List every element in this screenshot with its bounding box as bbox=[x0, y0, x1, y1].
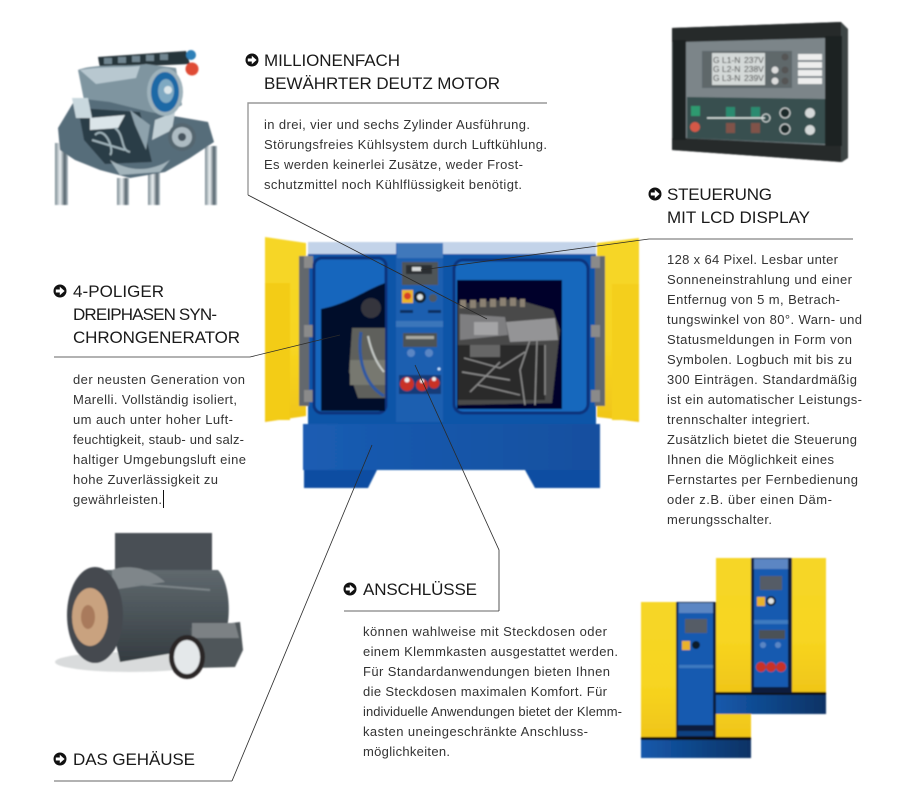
image: control panel bbox=[672, 22, 848, 162]
text: Anschlüsse: kasten uneingeschränkte Anschluss- bbox=[363, 724, 588, 739]
text: Motor: schutzmittel noch Kühlflüssigkeit benötigt. bbox=[264, 177, 522, 192]
text: Steuerung: Ihnen die Möglichkeit eines bbox=[667, 452, 834, 467]
heading: Gehäuse: DAS GEHÄUSE bbox=[73, 750, 195, 769]
image: Deutz engine bbox=[55, 50, 217, 205]
text: Anschlüsse bbox=[363, 624, 622, 759]
text: Steuerung: Entfernug von 5 m, Betrach- bbox=[667, 292, 840, 307]
text: Steuerung: Fernstartes per Fernbedienung bbox=[667, 472, 858, 487]
heading: Steuerung: STEUERUNG bbox=[667, 185, 772, 204]
image: control panel: G L1-N bbox=[713, 55, 740, 65]
text: Anschlüsse: Für Standardanwendungen bieten Ihnen bbox=[363, 664, 610, 679]
icon: arrow bbox=[246, 54, 258, 66]
text: Steuerung: Sonneneinstrahlung und einer bbox=[667, 272, 853, 287]
heading: Generator: CHRONGENERATOR bbox=[73, 328, 240, 347]
yellow door right bbox=[597, 238, 639, 422]
front cabinet bbox=[641, 602, 751, 758]
text: Motor bbox=[264, 117, 547, 192]
heading: Motor bbox=[264, 51, 500, 93]
text: Steuerung bbox=[667, 252, 862, 527]
text: Anschlüsse: können wahlweise mit Steckdosen oder bbox=[363, 624, 608, 639]
text: Anschlüsse: einem Klemmkasten ausgestattet werden. bbox=[363, 644, 618, 659]
text: Steuerung: oder z.B. über einen Däm- bbox=[667, 492, 832, 507]
back cabinet bbox=[716, 558, 826, 714]
image: control panel: 237V bbox=[744, 55, 764, 65]
section: Anschlüsse bbox=[344, 580, 622, 759]
text: Steuerung: Symbolen. Logbuch mit bis zu bbox=[667, 352, 852, 367]
text: Motor: Störungsfreies Kühlsystem durch Luftkühlung. bbox=[264, 137, 547, 152]
section: Gehäuse bbox=[54, 750, 195, 769]
text: Generator: der neusten Generation von bbox=[73, 372, 245, 387]
right window bbox=[454, 260, 588, 413]
image: control panel: G L2-N bbox=[713, 64, 740, 74]
image: control panel: 239V bbox=[744, 73, 764, 83]
text: Steuerung: Statusmeldungen in Form von bbox=[667, 332, 852, 347]
heading: Generator bbox=[73, 282, 240, 347]
heading: Motor: BEWÄHRTER DEUTZ MOTOR bbox=[264, 74, 500, 93]
text: Steuerung: trennschalter integriert. bbox=[667, 412, 810, 427]
icon: arrow bbox=[54, 752, 66, 766]
image: control column variants bbox=[641, 558, 826, 758]
text: Anschlüsse: möglichkeiten. bbox=[363, 744, 450, 759]
heading: Generator: DREIPHASEN SYN- bbox=[73, 305, 217, 324]
heading: Steuerung bbox=[667, 185, 810, 227]
heading: Anschlüsse: ANSCHLÜSSE bbox=[363, 580, 477, 599]
section: Steuerung bbox=[648, 185, 862, 527]
text: Steuerung: merungsschalter. bbox=[667, 512, 772, 527]
base bbox=[303, 424, 600, 470]
text: Steuerung: Zusätzlich bietet die Steuerung bbox=[667, 432, 857, 447]
text: Motor: in drei, vier und sechs Zylinder Ausführung. bbox=[264, 117, 530, 132]
image: control panel: G L3-N bbox=[713, 73, 740, 83]
text: Steuerung: 128 x 64 Pixel. Lesbar unter bbox=[667, 252, 839, 267]
image: alternator bbox=[55, 533, 243, 679]
heading: Motor: MILLIONENFACH bbox=[264, 51, 400, 70]
icon: arrow bbox=[344, 582, 356, 596]
text: Generator: gewährleisten. bbox=[73, 492, 162, 507]
text: Generator: um auch unter hoher Luft- bbox=[73, 412, 233, 427]
text: Anschlüsse: die Steckdosen maximalen Komfort. Für bbox=[363, 684, 608, 699]
text: Generator: Marelli. Vollständig isoliert, bbox=[73, 392, 237, 407]
text: Motor: Es werden keinerlei Zusätze, weder Frost- bbox=[264, 157, 523, 172]
icon: arrow bbox=[54, 284, 66, 298]
text: Steuerung: ist ein automatischer Leistungs- bbox=[667, 392, 862, 407]
heading: Generator: 4-POLIGER bbox=[73, 282, 164, 301]
left window bbox=[314, 258, 386, 413]
text: Steuerung: tungswinkel von 80°. Warn- und bbox=[667, 312, 862, 327]
heading: Steuerung: MIT LCD DISPLAY bbox=[667, 208, 810, 227]
text: Anschlüsse: individuelle Anwendungen bietet der Klemm- bbox=[363, 704, 622, 719]
centre panel bbox=[396, 243, 443, 422]
section: Generator bbox=[54, 282, 246, 507]
text: Steuerung: 300 Einträgen. Standardmäßig bbox=[667, 372, 857, 387]
leader lines bbox=[54, 103, 853, 781]
text: Generator bbox=[73, 372, 246, 507]
section: Deutz Motor bbox=[246, 51, 547, 192]
yellow door left bbox=[265, 237, 306, 422]
text: Generator: feuchtigkeit, staub- und salz- bbox=[73, 432, 244, 447]
text: Generator: hohe Zuverlässigkeit zu bbox=[73, 472, 218, 487]
icon: arrow bbox=[648, 188, 662, 200]
text: Generator: haltiger Umgebungsluft eine bbox=[73, 452, 246, 467]
image: control panel: 238V bbox=[744, 64, 764, 74]
image: generator set with open doors bbox=[265, 237, 639, 488]
